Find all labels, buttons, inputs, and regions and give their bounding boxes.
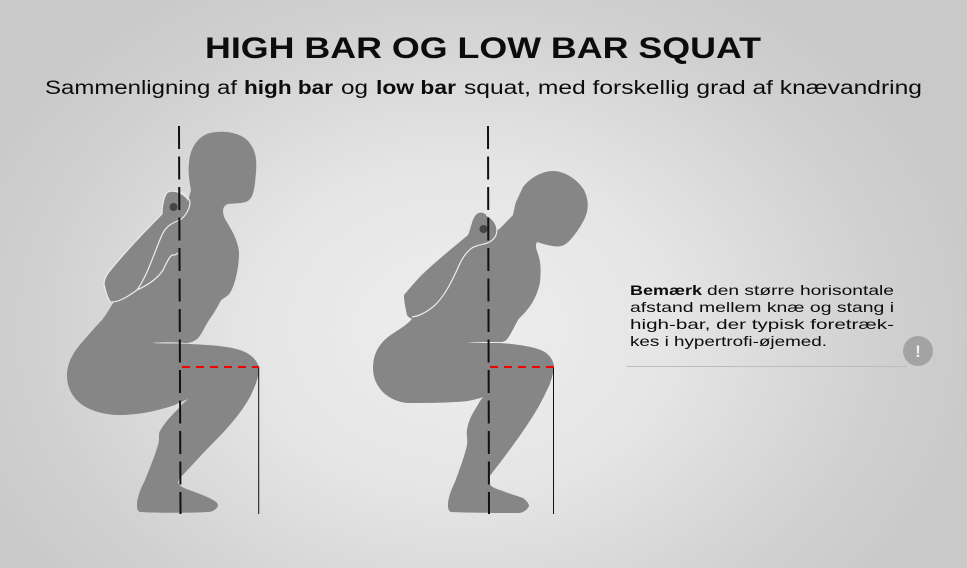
subtitle: low bar <box>376 78 457 99</box>
arm outline: high bar <box>104 191 190 303</box>
callout note: Bemærk <box>630 282 702 298</box>
knee vertical line: low bar <box>552 367 554 514</box>
silhouette: high bar <box>67 132 259 513</box>
callout note <box>630 282 894 349</box>
figure: low bar squat <box>373 126 588 514</box>
callout note: afstand mellem knæ og stang i <box>630 299 894 315</box>
barbell: high bar <box>170 203 178 211</box>
horizontal distance: low bar <box>490 366 554 368</box>
figure: high bar squat <box>67 126 259 514</box>
title: HIGH BAR OG LOW BAR SQUAT <box>205 32 761 65</box>
knee vertical line: high bar <box>258 367 260 514</box>
icon: exclamation badge: ! <box>915 342 921 361</box>
subtitle: high bar <box>244 78 334 99</box>
vertical bar line: high bar <box>179 126 180 514</box>
vertical bar line: low bar <box>488 126 489 514</box>
silhouette: low bar <box>373 171 588 513</box>
callout note: den større horisontale <box>707 282 894 298</box>
icon: exclamation badge <box>903 336 933 366</box>
subtitle: squat, med forskellig grad af knævandring <box>464 78 922 99</box>
subtitle: Sammenligning af <box>45 78 238 99</box>
horizontal distance: high bar <box>182 366 259 368</box>
subtitle <box>45 78 922 99</box>
subtitle: og <box>341 78 368 99</box>
callout note: kes i hypertrofi-øjemed. <box>630 333 827 349</box>
callout note: high-bar, der typisk foretræk- <box>630 316 894 332</box>
barbell: low bar <box>480 225 488 233</box>
arm outline: low bar <box>412 215 497 317</box>
forearm outline: high bar <box>137 253 178 290</box>
callout rule <box>627 366 907 367</box>
